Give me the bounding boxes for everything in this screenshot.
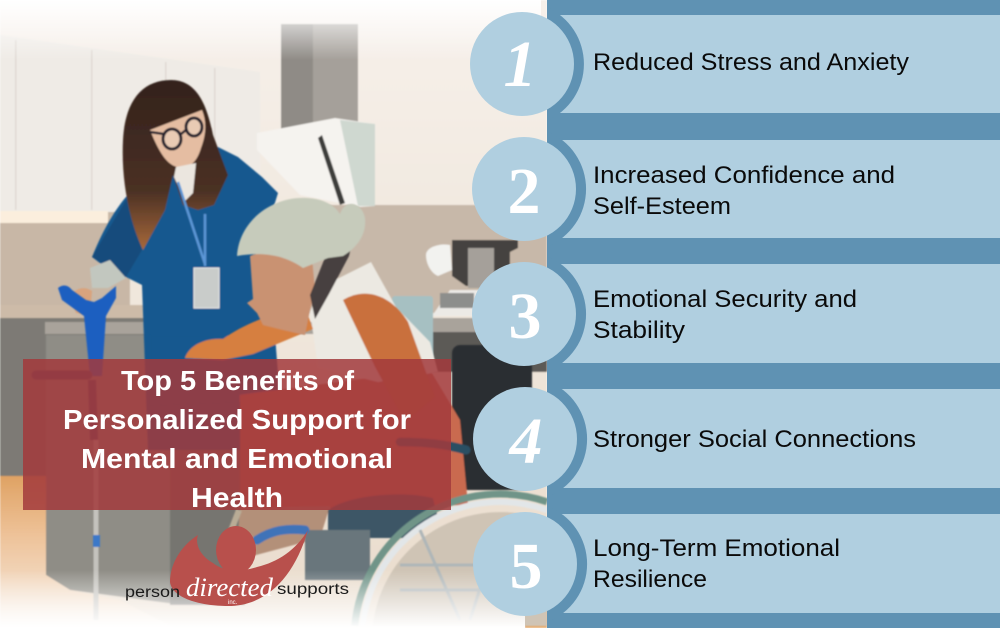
title banner [23, 359, 451, 513]
logo: person directed supports: person [125, 584, 180, 601]
benefit 2: 2 [508, 155, 540, 228]
benefit 2: Self-Esteem [593, 193, 731, 220]
benefit 2: Increased Confidence and [593, 162, 895, 189]
white fade: bottom of photo [0, 570, 525, 628]
benefit 4 [473, 381, 1000, 497]
panel: benefits list [470, 0, 1000, 628]
logo: person directed supports: directed [186, 573, 274, 602]
white fade: top of photo [0, 0, 541, 60]
benefit 1 [470, 7, 1000, 121]
title text: Health [191, 482, 283, 513]
benefit 4: Stronger Social Connections [593, 426, 916, 453]
title text: Top 5 Benefits of [121, 365, 355, 396]
benefit 3: Emotional Security and [593, 286, 857, 313]
photo background: kitchen [0, 0, 547, 628]
logo: person directed supports [125, 526, 349, 606]
benefit 3: Stability [593, 317, 685, 344]
seated woman and wheelchair [150, 198, 547, 626]
benefit 5: Long-Term Emotional [593, 535, 840, 562]
range hood [281, 24, 358, 129]
caregiver figure [70, 80, 278, 450]
benefit 2 [472, 131, 1000, 247]
title text [63, 365, 411, 513]
benefit 5 [473, 506, 1000, 622]
logo: person directed supports: inc. [228, 600, 238, 606]
photo: caregiver helping a woman in a wheelchair [0, 0, 547, 628]
benefit 5: Resilience [593, 566, 707, 593]
title text: Mental and Emotional [81, 443, 393, 474]
title text: Personalized Support for [63, 404, 411, 435]
stand mixer [426, 244, 452, 276]
benefit 5: 5 [510, 530, 542, 603]
logo: person directed supports: supports [277, 581, 349, 598]
benefit 1: Reduced Stress and Anxiety [593, 49, 909, 76]
benefit 4: 4 [508, 405, 542, 478]
crutch [36, 286, 116, 620]
benefit 3: 3 [508, 280, 542, 353]
benefit 3 [472, 256, 1000, 372]
benefit 1: 1 [504, 28, 536, 101]
